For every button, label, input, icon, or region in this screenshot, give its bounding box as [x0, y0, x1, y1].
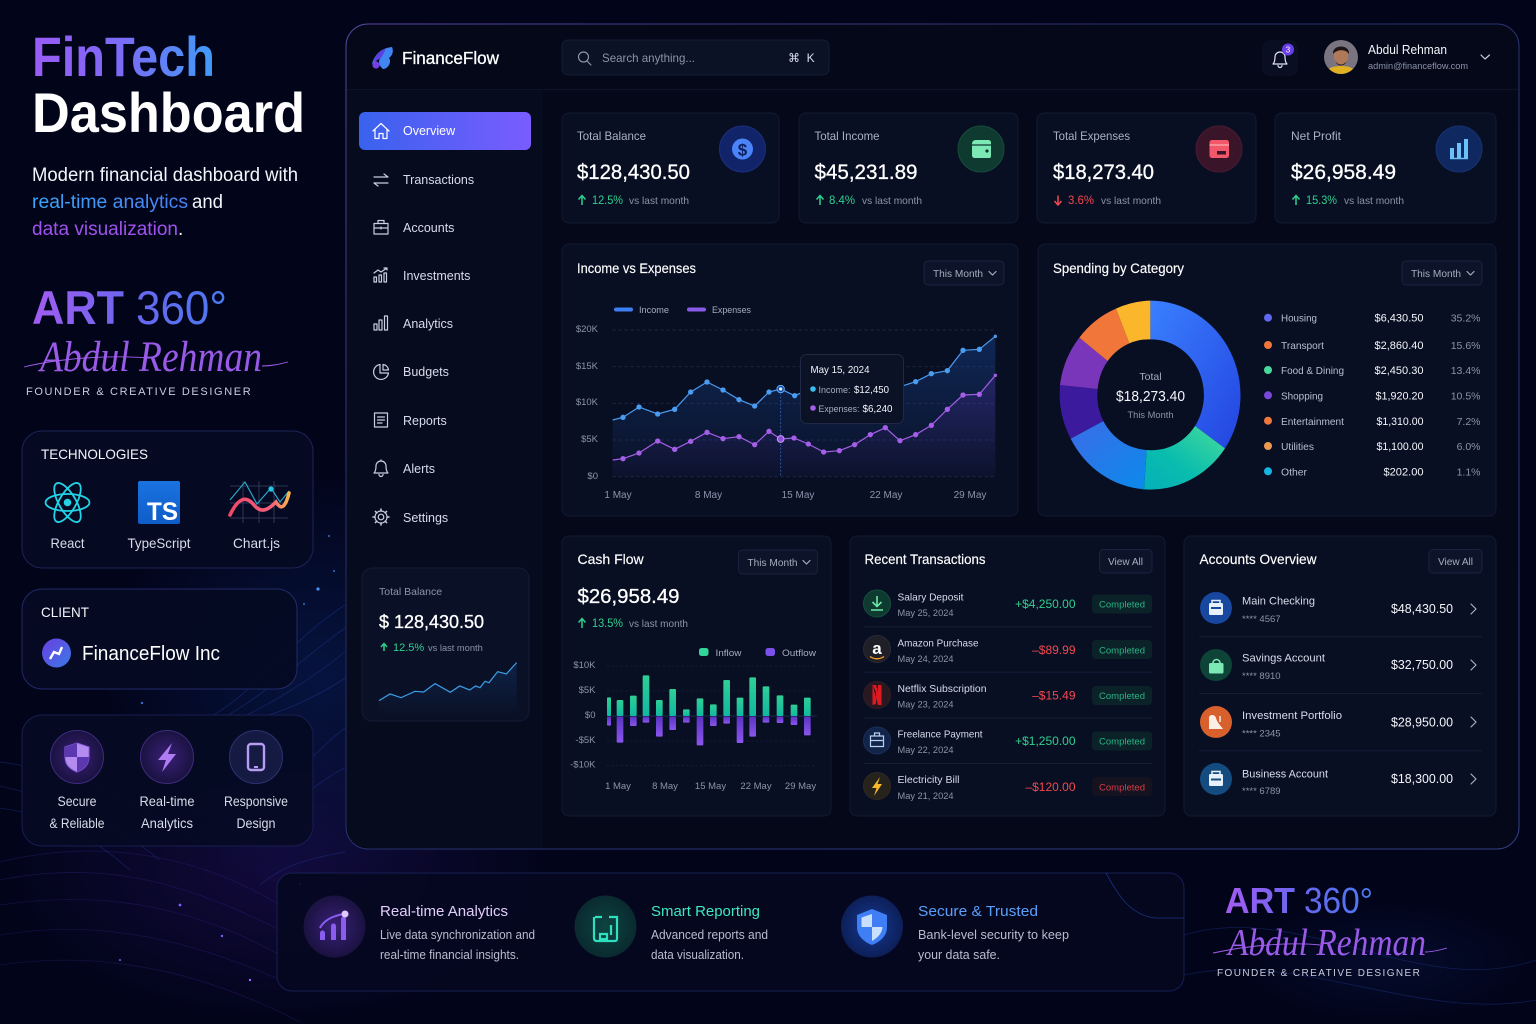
- transaction: netflix subscription: May 23, 2024: [898, 700, 954, 710]
- feature: smart reporting: Smart Reporting: [651, 904, 760, 920]
- category legend: Entertainment: [1281, 416, 1344, 428]
- y axis labels: $15K: [576, 361, 599, 372]
- feature: real-time analytics: Real-time: [140, 793, 195, 809]
- stat card: total income: [799, 113, 1018, 223]
- category legend: Transport: [1281, 340, 1324, 352]
- feature: responsive design: [224, 730, 288, 831]
- icon: wallet: [958, 126, 1004, 172]
- transaction: salary deposit: May 25, 2024: [898, 608, 954, 619]
- category legend: 7.2%: [1457, 416, 1480, 428]
- nav: analytics: Analytics: [403, 317, 453, 331]
- panel: technologies: [22, 431, 313, 568]
- client name: FinanceFlow Inc: [82, 643, 220, 665]
- brand: ART 360 with signature: 360°: [136, 281, 227, 334]
- user name: Abdul Rehman: [1368, 43, 1447, 57]
- cash flow total: 13.5%: [592, 616, 623, 630]
- icon: dollar: [720, 126, 766, 172]
- category legend: $1,920.20: [1376, 390, 1424, 402]
- feature: responsive design: Design: [236, 815, 276, 831]
- x axis labels: [604, 490, 986, 501]
- icon: React: [46, 479, 90, 526]
- card: sidebar total balance: 12.5%: [393, 642, 424, 654]
- legend: Outflow: [782, 648, 816, 659]
- feature: secure and reliable: Secure: [58, 793, 97, 809]
- stat card: total expenses: $18,273.40: [1053, 161, 1154, 184]
- heading: Recent Transactions: [864, 551, 986, 567]
- legend: [614, 305, 751, 316]
- icon: TypeScript: [138, 481, 180, 526]
- icon: Chart.js: [230, 481, 289, 523]
- feature: real-time analytics: real-time financial insights.: [380, 948, 519, 962]
- category legend: 13.4%: [1451, 365, 1480, 377]
- nav: accounts: [374, 220, 454, 235]
- bar chart: [607, 666, 817, 766]
- button: view all: View All: [1438, 556, 1473, 568]
- transaction: amazon purchase: May 24, 2024: [898, 654, 954, 665]
- search box: Search anything...: [602, 51, 695, 65]
- transaction: netflix subscription: –$15.49: [1032, 688, 1076, 702]
- x axis labels: 1 May: [604, 490, 632, 501]
- y axis labels: [576, 324, 599, 482]
- feature: secure and trusted: Bank-level security to keep: [918, 928, 1069, 942]
- x axis labels: 8 May: [652, 781, 678, 792]
- account: savings account: Savings Account: [1242, 652, 1325, 664]
- stat card: total balance: vs last month: [629, 195, 689, 207]
- account: main checking: [1200, 592, 1476, 625]
- label: React: React: [50, 535, 85, 551]
- brand: ART 360 with signature: Abdul Rehman: [37, 334, 262, 381]
- stat card: net profit: vs last month: [1344, 195, 1404, 207]
- top bar: [347, 40, 1518, 90]
- transaction: salary deposit: Salary Deposit: [898, 592, 964, 604]
- heading: Cash Flow: [578, 551, 645, 567]
- category legend: $1,100.00: [1376, 441, 1424, 453]
- nav: budgets: Budgets: [403, 365, 449, 379]
- stat card: total balance: 12.5%: [592, 193, 623, 207]
- nav: settings: Settings: [403, 511, 448, 525]
- category legend: $202.00: [1384, 466, 1424, 478]
- transaction: freelance payment: [864, 727, 1152, 756]
- y axis labels: $5K: [579, 685, 596, 696]
- brand: ART 360 bottom right: [1213, 880, 1447, 979]
- category legend: 10.5%: [1451, 390, 1480, 402]
- stat card: total income: $45,231.89: [814, 161, 918, 184]
- category legend: Housing: [1281, 312, 1317, 324]
- dropdown: This Month: [1411, 268, 1461, 280]
- tooltip: $6,240: [862, 403, 893, 415]
- transaction: amazon purchase: Amazon Purchase: [898, 638, 979, 650]
- heading: technologies: TECHNOLOGIES: [41, 446, 148, 462]
- x axis labels: 29 May: [785, 781, 816, 792]
- category legend: [1264, 312, 1480, 478]
- brand: ART 360 with signature: FOUNDER & CREATIVE DESIGNER: [26, 386, 252, 398]
- stat card: total income: vs last month: [862, 195, 922, 207]
- legend: Inflow: [716, 648, 742, 659]
- panel: bottom feature strip: [277, 873, 1184, 991]
- user avatar: [1324, 40, 1358, 74]
- nav: alerts: Alerts: [403, 462, 435, 476]
- account: business account: **** 6789: [1242, 786, 1281, 797]
- account: business account: $18,300.00: [1391, 772, 1453, 786]
- stat card: total expenses: vs last month: [1101, 195, 1161, 207]
- account: investment portfolio: Investment Portfolio: [1242, 710, 1342, 722]
- heading: Income vs Expenses: [577, 261, 696, 276]
- panel: cash flow: [562, 536, 831, 816]
- transaction: electricity bill: [864, 772, 1152, 802]
- brand: ART 360 bottom right: FOUNDER & CREATIVE DESIGNER: [1217, 968, 1421, 979]
- account: business account: [1200, 763, 1476, 797]
- icon: client logo: [42, 638, 71, 668]
- panel: spending by category: [1038, 244, 1496, 516]
- transaction: freelance payment: +$1,250.00: [1015, 734, 1076, 748]
- transaction: electricity bill: Completed: [1099, 782, 1145, 794]
- account: savings account: [1200, 649, 1476, 682]
- category legend: $2,450.30: [1374, 365, 1424, 377]
- brand: ART 360 bottom right: ART: [1225, 880, 1295, 921]
- nav: budgets: [374, 364, 449, 379]
- user name: [1368, 43, 1490, 72]
- notification bell: [1262, 40, 1298, 76]
- title: FinTech Dashboard: FinTech: [32, 25, 215, 88]
- logo: FinanceFlow: FinanceFlow: [402, 48, 499, 68]
- feature: real-time analytics: Live data synchronization and: [380, 928, 535, 942]
- tooltip: [800, 354, 904, 424]
- account: main checking: **** 4567: [1242, 614, 1281, 625]
- button: view all: View All: [1108, 556, 1143, 568]
- subtitle text block: [32, 165, 298, 240]
- stat card: total balance: [562, 113, 779, 223]
- transaction: netflix subscription: Completed: [1099, 691, 1145, 702]
- nav: analytics: [374, 316, 453, 331]
- icon: credit card: [1196, 126, 1242, 172]
- x axis labels: 15 May: [695, 781, 726, 792]
- transaction: amazon purchase: –$89.99: [1032, 643, 1076, 657]
- card: sidebar total balance: Total Balance: [379, 586, 442, 598]
- transaction: freelance payment: Freelance Payment: [898, 728, 983, 740]
- stat card: net profit: [1275, 113, 1496, 223]
- nav: overview active: [359, 112, 531, 150]
- stat card: total income: Total Income: [814, 129, 880, 143]
- donut center label: Total: [1139, 371, 1162, 383]
- stat card: net profit: $26,958.49: [1291, 161, 1396, 184]
- category legend: $2,860.40: [1374, 340, 1424, 352]
- account: main checking: Main Checking: [1242, 596, 1315, 608]
- icon: bar chart: [1436, 126, 1482, 172]
- feature: real-time analytics: Analytics: [141, 815, 193, 831]
- tooltip: $12,450: [854, 384, 889, 396]
- legend: [699, 648, 816, 659]
- nav: settings: [373, 509, 448, 525]
- cash flow total: vs last month: [629, 618, 688, 630]
- panel: income vs expenses: [562, 244, 1018, 516]
- y axis labels: [570, 660, 596, 770]
- account: main checking: $48,430.50: [1391, 602, 1453, 616]
- title: FinTech Dashboard: Dashboard: [32, 81, 305, 144]
- subtitle text block: data visualization: [32, 219, 178, 240]
- feature: secure and reliable: [50, 730, 105, 831]
- donut center label: $18,273.40: [1116, 389, 1185, 405]
- subtitle text block: Modern financial dashboard with: [32, 165, 298, 186]
- dropdown: This Month: [933, 268, 983, 280]
- donut center label: This Month: [1128, 410, 1174, 421]
- transaction: electricity bill: Electricity Bill: [898, 774, 960, 786]
- donut center label: [1116, 371, 1185, 421]
- account: investment portfolio: **** 2345: [1242, 728, 1281, 740]
- subtitle text block: and: [192, 192, 223, 213]
- sidebar: [347, 47, 543, 848]
- transaction: salary deposit: +$4,250.00: [1015, 597, 1076, 611]
- feature: secure and reliable: & Reliable: [50, 815, 105, 831]
- category legend: 6.0%: [1457, 441, 1480, 453]
- line chart: [613, 330, 997, 477]
- account: investment portfolio: $28,950.00: [1391, 716, 1453, 730]
- dropdown: [738, 550, 818, 574]
- transaction: salary deposit: [864, 590, 1152, 619]
- nav: overview active: Overview: [403, 124, 456, 138]
- donut chart: [1060, 301, 1240, 490]
- tooltip: Expenses:: [818, 404, 860, 415]
- label: TypeScript: TypeScript: [128, 535, 191, 551]
- x axis labels: 8 May: [695, 490, 722, 501]
- transaction: amazon purchase: [864, 636, 1152, 665]
- brand: ART 360 bottom right: Abdul Rehman: [1225, 922, 1426, 964]
- feature: responsive design: Responsive: [224, 793, 288, 809]
- search box: ⌘ K: [788, 51, 815, 65]
- search box: [562, 40, 829, 75]
- nav: alerts: [374, 460, 435, 476]
- dropdown: This Month: [748, 557, 798, 569]
- account: business account: Business Account: [1242, 768, 1328, 780]
- nav: reports: [374, 413, 447, 428]
- y axis labels: $20K: [576, 324, 599, 335]
- feature: smart reporting: [574, 896, 768, 962]
- stat card: total balance: $128,430.50: [577, 161, 690, 184]
- title: FinTech Dashboard: [32, 25, 305, 144]
- x axis labels: [605, 781, 816, 792]
- category legend: Other: [1281, 466, 1307, 478]
- heading: Spending by Category: [1053, 261, 1184, 276]
- transaction: amazon purchase: a: [872, 639, 882, 658]
- card: sidebar total balance: vs last month: [428, 643, 483, 653]
- legend: Expenses: [712, 305, 751, 316]
- feature: secure and trusted: your data safe.: [918, 948, 1000, 962]
- stat card: total expenses: 3.6%: [1068, 193, 1094, 207]
- notification bell: 3: [1286, 46, 1291, 54]
- dropdown: [1402, 261, 1482, 285]
- legend: Income: [639, 305, 669, 316]
- heading: client: CLIENT: [41, 604, 89, 620]
- x axis labels: 15 May: [782, 490, 814, 501]
- cash flow total: $26,958.49: [578, 585, 680, 608]
- panel: accounts overview: [1184, 536, 1496, 816]
- dashboard window: [346, 24, 1519, 849]
- tooltip: Income:: [818, 385, 850, 396]
- nav: reports: Reports: [403, 414, 447, 428]
- category legend: 1.1%: [1457, 466, 1480, 478]
- feature: smart reporting: Advanced reports and: [651, 928, 768, 942]
- card: sidebar total balance: [362, 568, 529, 721]
- nav: investments: [374, 268, 470, 283]
- account: savings account: $32,750.00: [1391, 658, 1453, 672]
- icon: TypeScript: TS: [147, 498, 178, 526]
- brand: ART 360 with signature: ART: [32, 281, 124, 334]
- panel: features: [22, 715, 313, 846]
- transaction: netflix subscription: Netflix Subscription: [898, 683, 987, 695]
- brand: ART 360 with signature: [24, 281, 288, 398]
- account: investment portfolio: [1200, 706, 1476, 740]
- label: Chart.js: Chart.js: [233, 535, 280, 551]
- y axis labels: -$5K: [575, 735, 596, 746]
- transaction: electricity bill: May 21, 2024: [898, 791, 954, 802]
- card: sidebar total balance: $ 128,430.50: [379, 612, 484, 632]
- nav: transactions: Transactions: [403, 173, 474, 187]
- x axis labels: 1 May: [605, 781, 631, 792]
- y axis labels: $10K: [576, 397, 599, 408]
- subtitle text block: .: [178, 219, 183, 240]
- icon: dollar: $: [738, 140, 748, 160]
- heading: Accounts Overview: [1200, 551, 1317, 567]
- button: view all: [1100, 550, 1152, 573]
- y axis labels: $0: [587, 471, 598, 482]
- stat card: net profit: Net Profit: [1291, 129, 1342, 143]
- feature: real-time analytics: [140, 730, 195, 831]
- feature: secure and trusted: [841, 896, 1069, 962]
- panel: recent transactions: [850, 536, 1165, 816]
- x axis labels: 22 May: [870, 490, 902, 501]
- nav: accounts: Accounts: [403, 221, 454, 235]
- feature: real-time analytics: Real-time Analytics: [380, 904, 508, 920]
- transaction: freelance payment: Completed: [1099, 736, 1145, 748]
- category legend: Shopping: [1281, 390, 1323, 402]
- transaction: freelance payment: May 22, 2024: [898, 745, 954, 756]
- panel: client: [22, 589, 297, 689]
- y axis labels: $10K: [573, 660, 596, 671]
- category legend: 35.2%: [1451, 312, 1480, 324]
- x axis labels: 29 May: [954, 490, 986, 501]
- subtitle text block: real-time analytics: [32, 192, 188, 213]
- transaction: netflix subscription: [864, 682, 1152, 710]
- account: savings account: **** 8910: [1242, 671, 1281, 682]
- category legend: Food & Dining: [1281, 365, 1344, 377]
- transaction: salary deposit: Completed: [1099, 600, 1145, 610]
- stat card: total expenses: [1037, 113, 1256, 223]
- cash flow total: [578, 585, 688, 630]
- button: view all: [1429, 550, 1482, 573]
- stat card: total expenses: Total Expenses: [1053, 129, 1130, 143]
- feature: smart reporting: data visualization.: [651, 948, 744, 962]
- stat card: net profit: 15.3%: [1306, 193, 1337, 207]
- stat card: total balance: Total Balance: [577, 129, 646, 143]
- dropdown: [924, 261, 1004, 285]
- category legend: Utilities: [1281, 441, 1314, 453]
- nav: investments: Investments: [403, 269, 470, 283]
- tooltip: May 15, 2024: [810, 364, 870, 376]
- transaction: amazon purchase: Completed: [1099, 646, 1145, 656]
- stat card: total income: 8.4%: [829, 193, 855, 207]
- x axis labels: 22 May: [740, 781, 772, 792]
- y axis labels: $0: [585, 710, 596, 721]
- user name: admin@financeflow.com: [1368, 61, 1468, 72]
- logo: FinanceFlow: [372, 47, 499, 69]
- transaction: electricity bill: –$120.00: [1025, 780, 1076, 794]
- y axis labels: -$10K: [570, 760, 596, 770]
- brand: ART 360 bottom right: 360°: [1304, 880, 1373, 921]
- category legend: $1,310.00: [1376, 416, 1424, 428]
- category legend: 15.6%: [1451, 340, 1480, 352]
- category legend: $6,430.50: [1374, 312, 1424, 324]
- feature: secure and trusted: Secure & Trusted: [918, 904, 1038, 920]
- y axis labels: $5K: [581, 434, 599, 445]
- feature: real-time analytics: [304, 896, 535, 962]
